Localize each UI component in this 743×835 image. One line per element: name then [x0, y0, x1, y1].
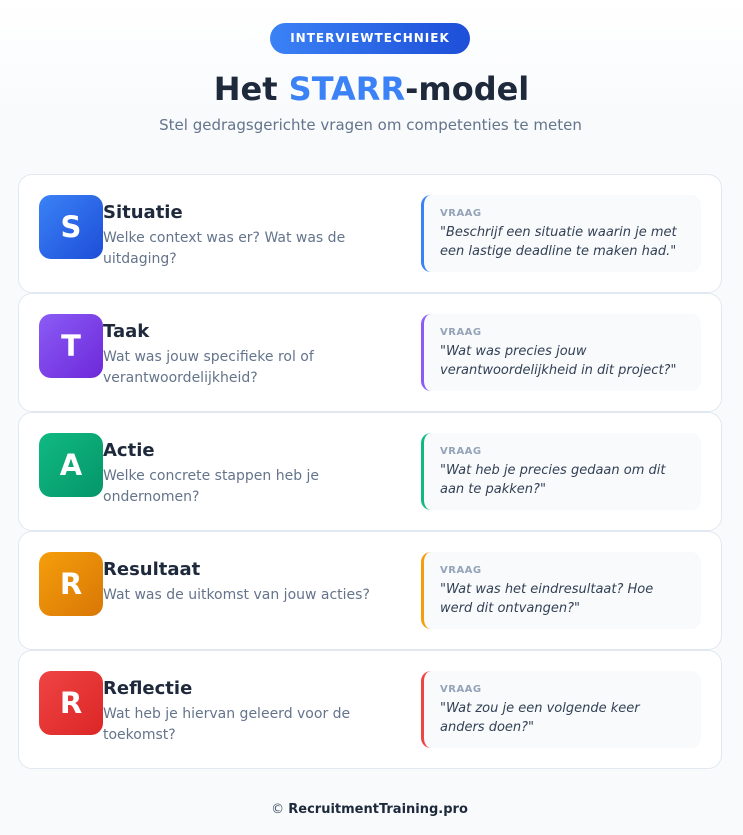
icon: S [39, 195, 103, 259]
icon: R: R [60, 686, 82, 720]
panel: Actie [18, 412, 722, 531]
footer: © RecruitmentTraining.pro [271, 802, 468, 817]
icon: R [39, 671, 103, 735]
icon: R: R [60, 567, 82, 601]
question: Situatie: VRAAG [440, 208, 482, 219]
question: Reflectie: VRAAG [440, 684, 482, 695]
icon: T: T [61, 329, 81, 363]
question: Actie: "Wat heb je precies gedaan om dit aan te pakken?" [440, 463, 665, 497]
text: Situatie: Situatie [103, 202, 183, 223]
question: Resultaat: "Wat was het eindresultaat? Hoe werd dit ontvangen?" [440, 582, 653, 616]
icon: S: S [61, 210, 81, 244]
text: Actie [103, 440, 319, 505]
question: Taak [421, 314, 701, 391]
icon: A [39, 433, 103, 497]
panel: Taak [18, 293, 722, 412]
text: Taak: Wat was jouw specifieke rol of verantwoordelijkheid? [103, 349, 314, 386]
question: Taak: VRAAG [440, 327, 482, 338]
question: Actie [421, 433, 701, 510]
icon: A: A [60, 448, 82, 482]
text: Taak: Taak [103, 321, 149, 342]
text: Taak [103, 321, 314, 386]
panel: Reflectie [18, 650, 722, 769]
text: Resultaat: Resultaat [103, 559, 200, 580]
question: Resultaat: VRAAG [440, 565, 482, 576]
question: Actie: VRAAG [440, 446, 482, 457]
icon: T [39, 314, 103, 378]
text: Reflectie: Wat heb je hiervan geleerd voor de toekomst? [103, 706, 350, 743]
text: Resultaat: Wat was de uitkomst van jouw acties? [103, 587, 370, 603]
title: Het STARR-model [214, 70, 529, 108]
question: Resultaat [421, 552, 701, 629]
text: Situatie: Welke context was er? Wat was de uitdaging? [103, 230, 345, 267]
text: Situatie [103, 202, 345, 267]
question: Situatie [421, 195, 701, 272]
text: Reflectie [103, 678, 350, 743]
text: Actie: Welke concrete stappen heb je ondernomen? [103, 468, 319, 505]
badge: INTERVIEWTECHNIEK [290, 31, 450, 45]
text: Resultaat [103, 559, 370, 603]
question: Reflectie: "Wat zou je een volgende keer anders doen?" [440, 701, 640, 735]
question: Situatie: "Beschrijf een situatie waarin je met een lastige deadline te maken had." [440, 225, 677, 259]
panel: Resultaat [18, 531, 722, 650]
subtitle: Stel gedragsgerichte vragen om competenties te meten [159, 116, 582, 134]
panel: Situatie [18, 174, 722, 293]
icon: R [39, 552, 103, 616]
question: Taak: "Wat was precies jouw verantwoordelijkheid in dit project?" [440, 344, 676, 378]
question: Reflectie [421, 671, 701, 748]
badge [270, 23, 470, 54]
text: Actie: Actie [103, 440, 155, 461]
text: Reflectie: Reflectie [103, 678, 192, 699]
